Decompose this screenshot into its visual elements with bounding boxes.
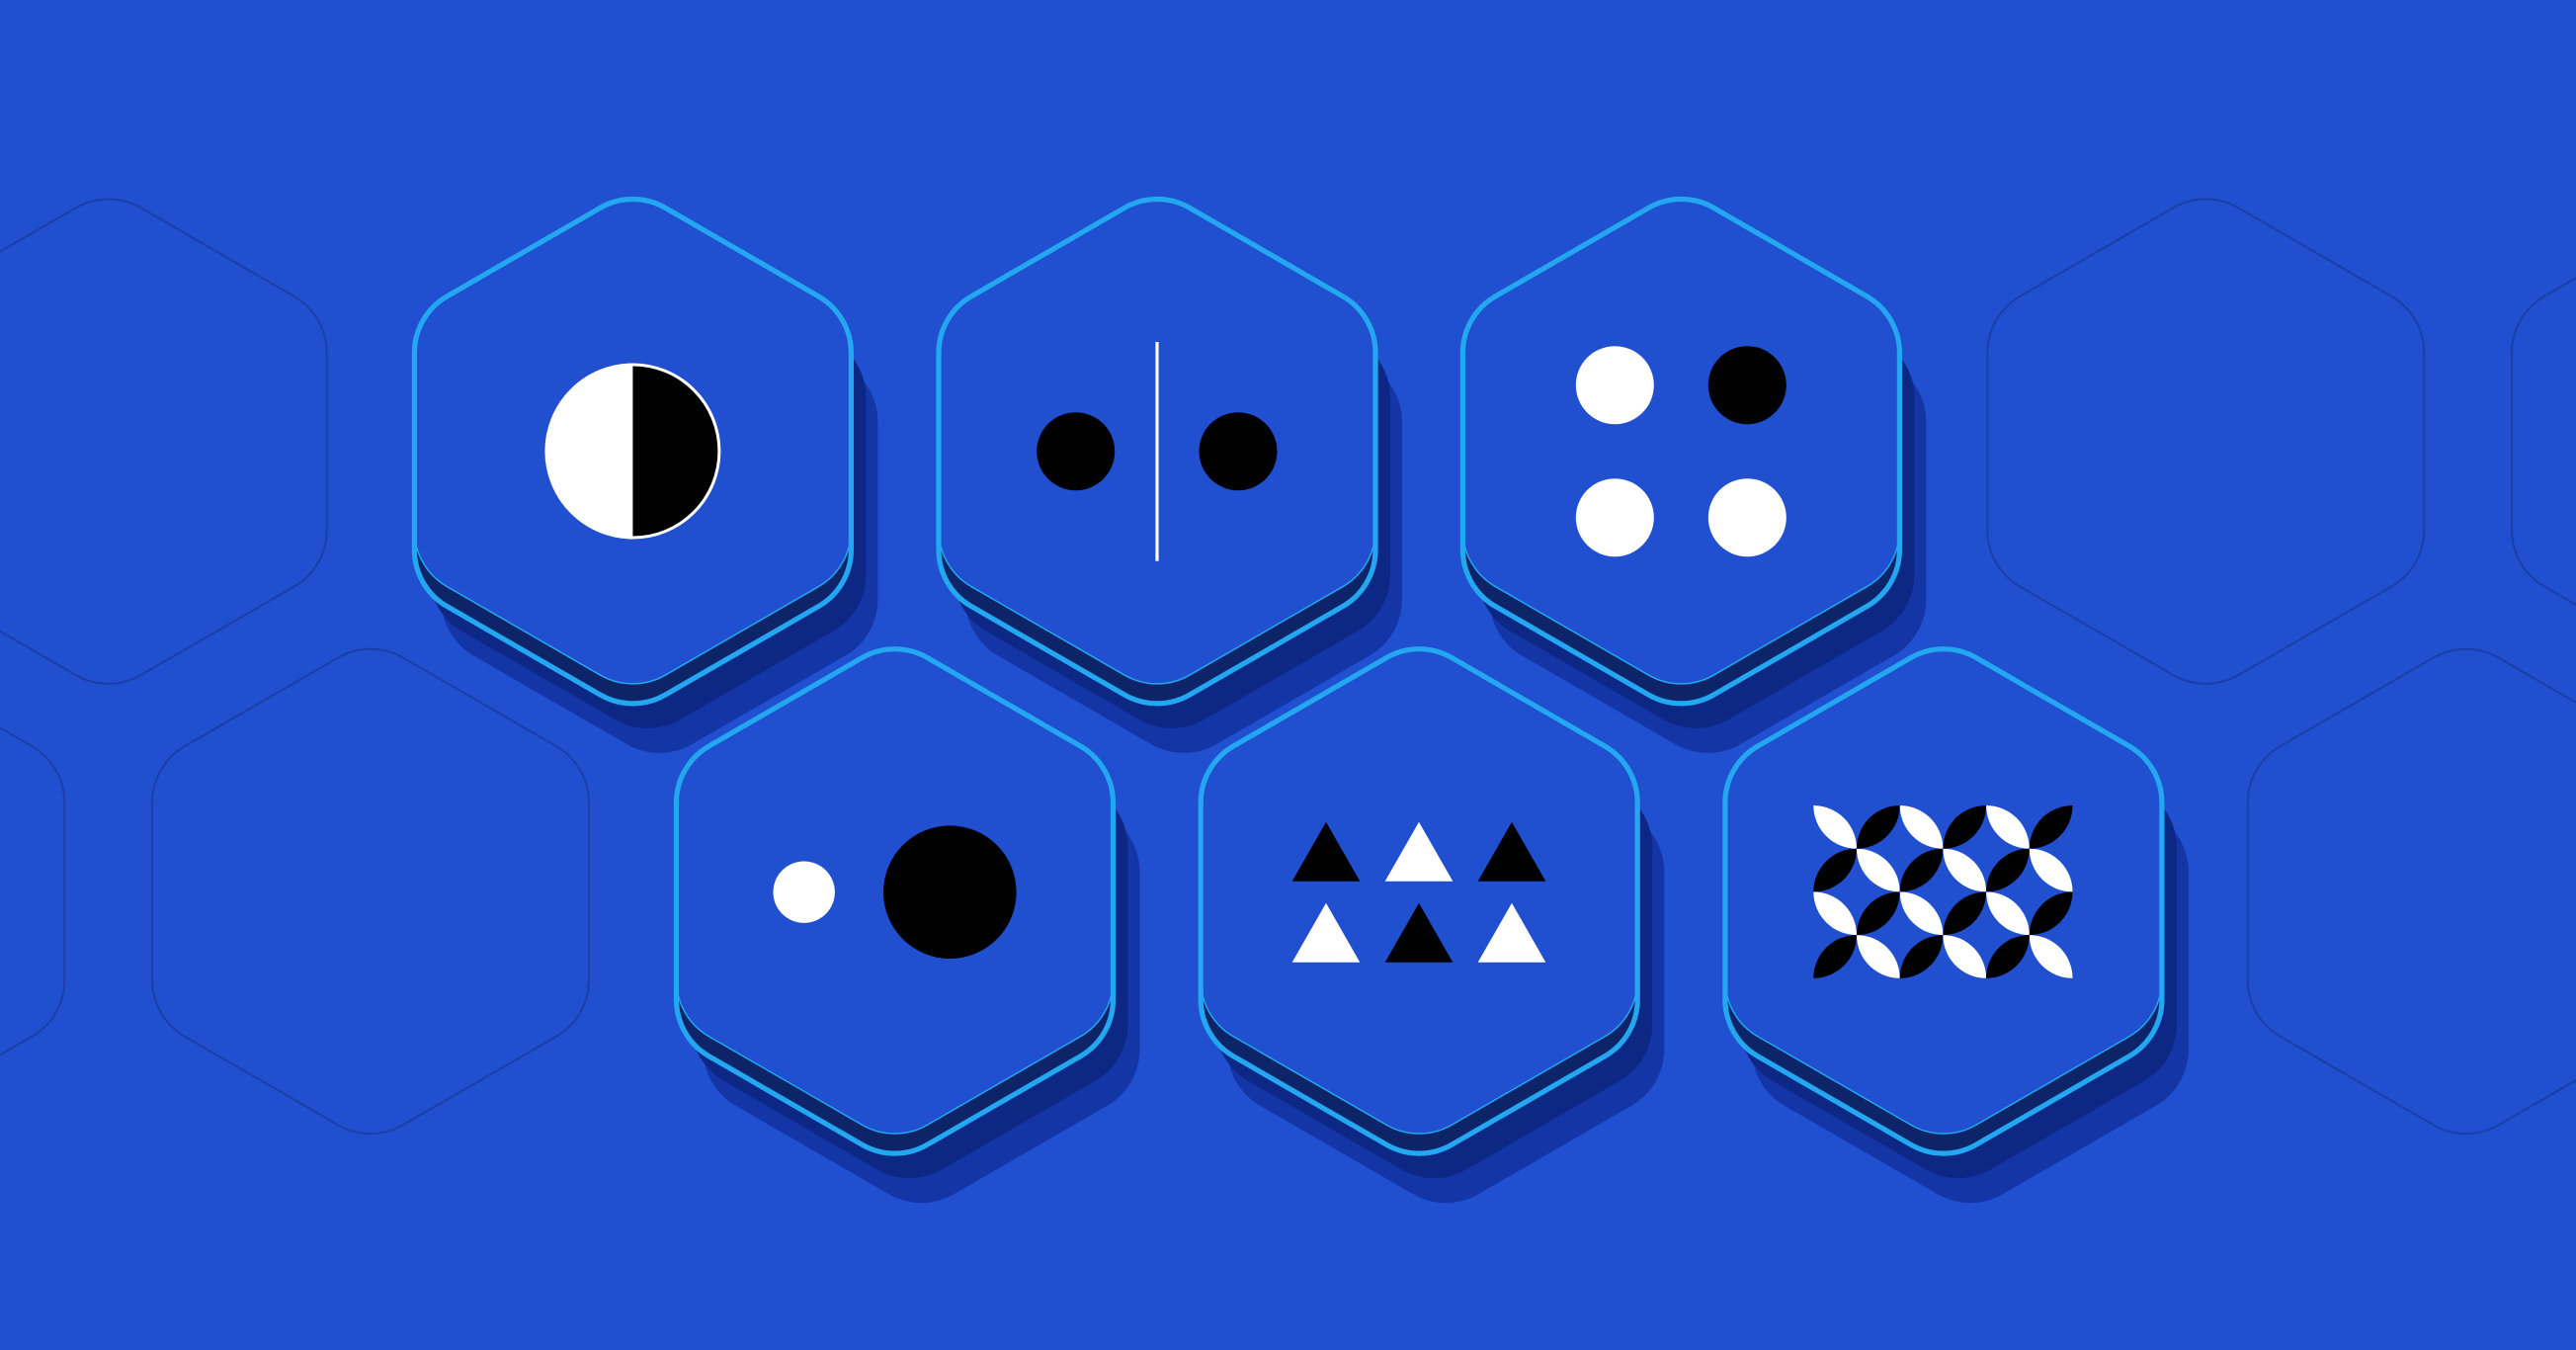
icon: half circle xyxy=(546,365,719,538)
icon: two black circles split by a line xyxy=(1037,342,1277,561)
panel: leaf pattern hexagon xyxy=(1725,649,2189,1203)
background hexagon outlines xyxy=(0,200,2576,1134)
icon: small white and large black circle xyxy=(773,825,1017,959)
icon: leaf pattern xyxy=(1813,805,2073,978)
icon: six triangles xyxy=(1292,822,1545,963)
panel: triangles hexagon xyxy=(1201,649,1664,1203)
panel: four circles hexagon xyxy=(1462,200,1926,753)
panel: half white half black circle hexagon xyxy=(414,200,877,753)
panel: two circles with divider hexagon xyxy=(939,200,1402,753)
panel: small and large circle hexagon xyxy=(676,649,1140,1203)
icon: grid of four circles xyxy=(1576,346,1787,556)
